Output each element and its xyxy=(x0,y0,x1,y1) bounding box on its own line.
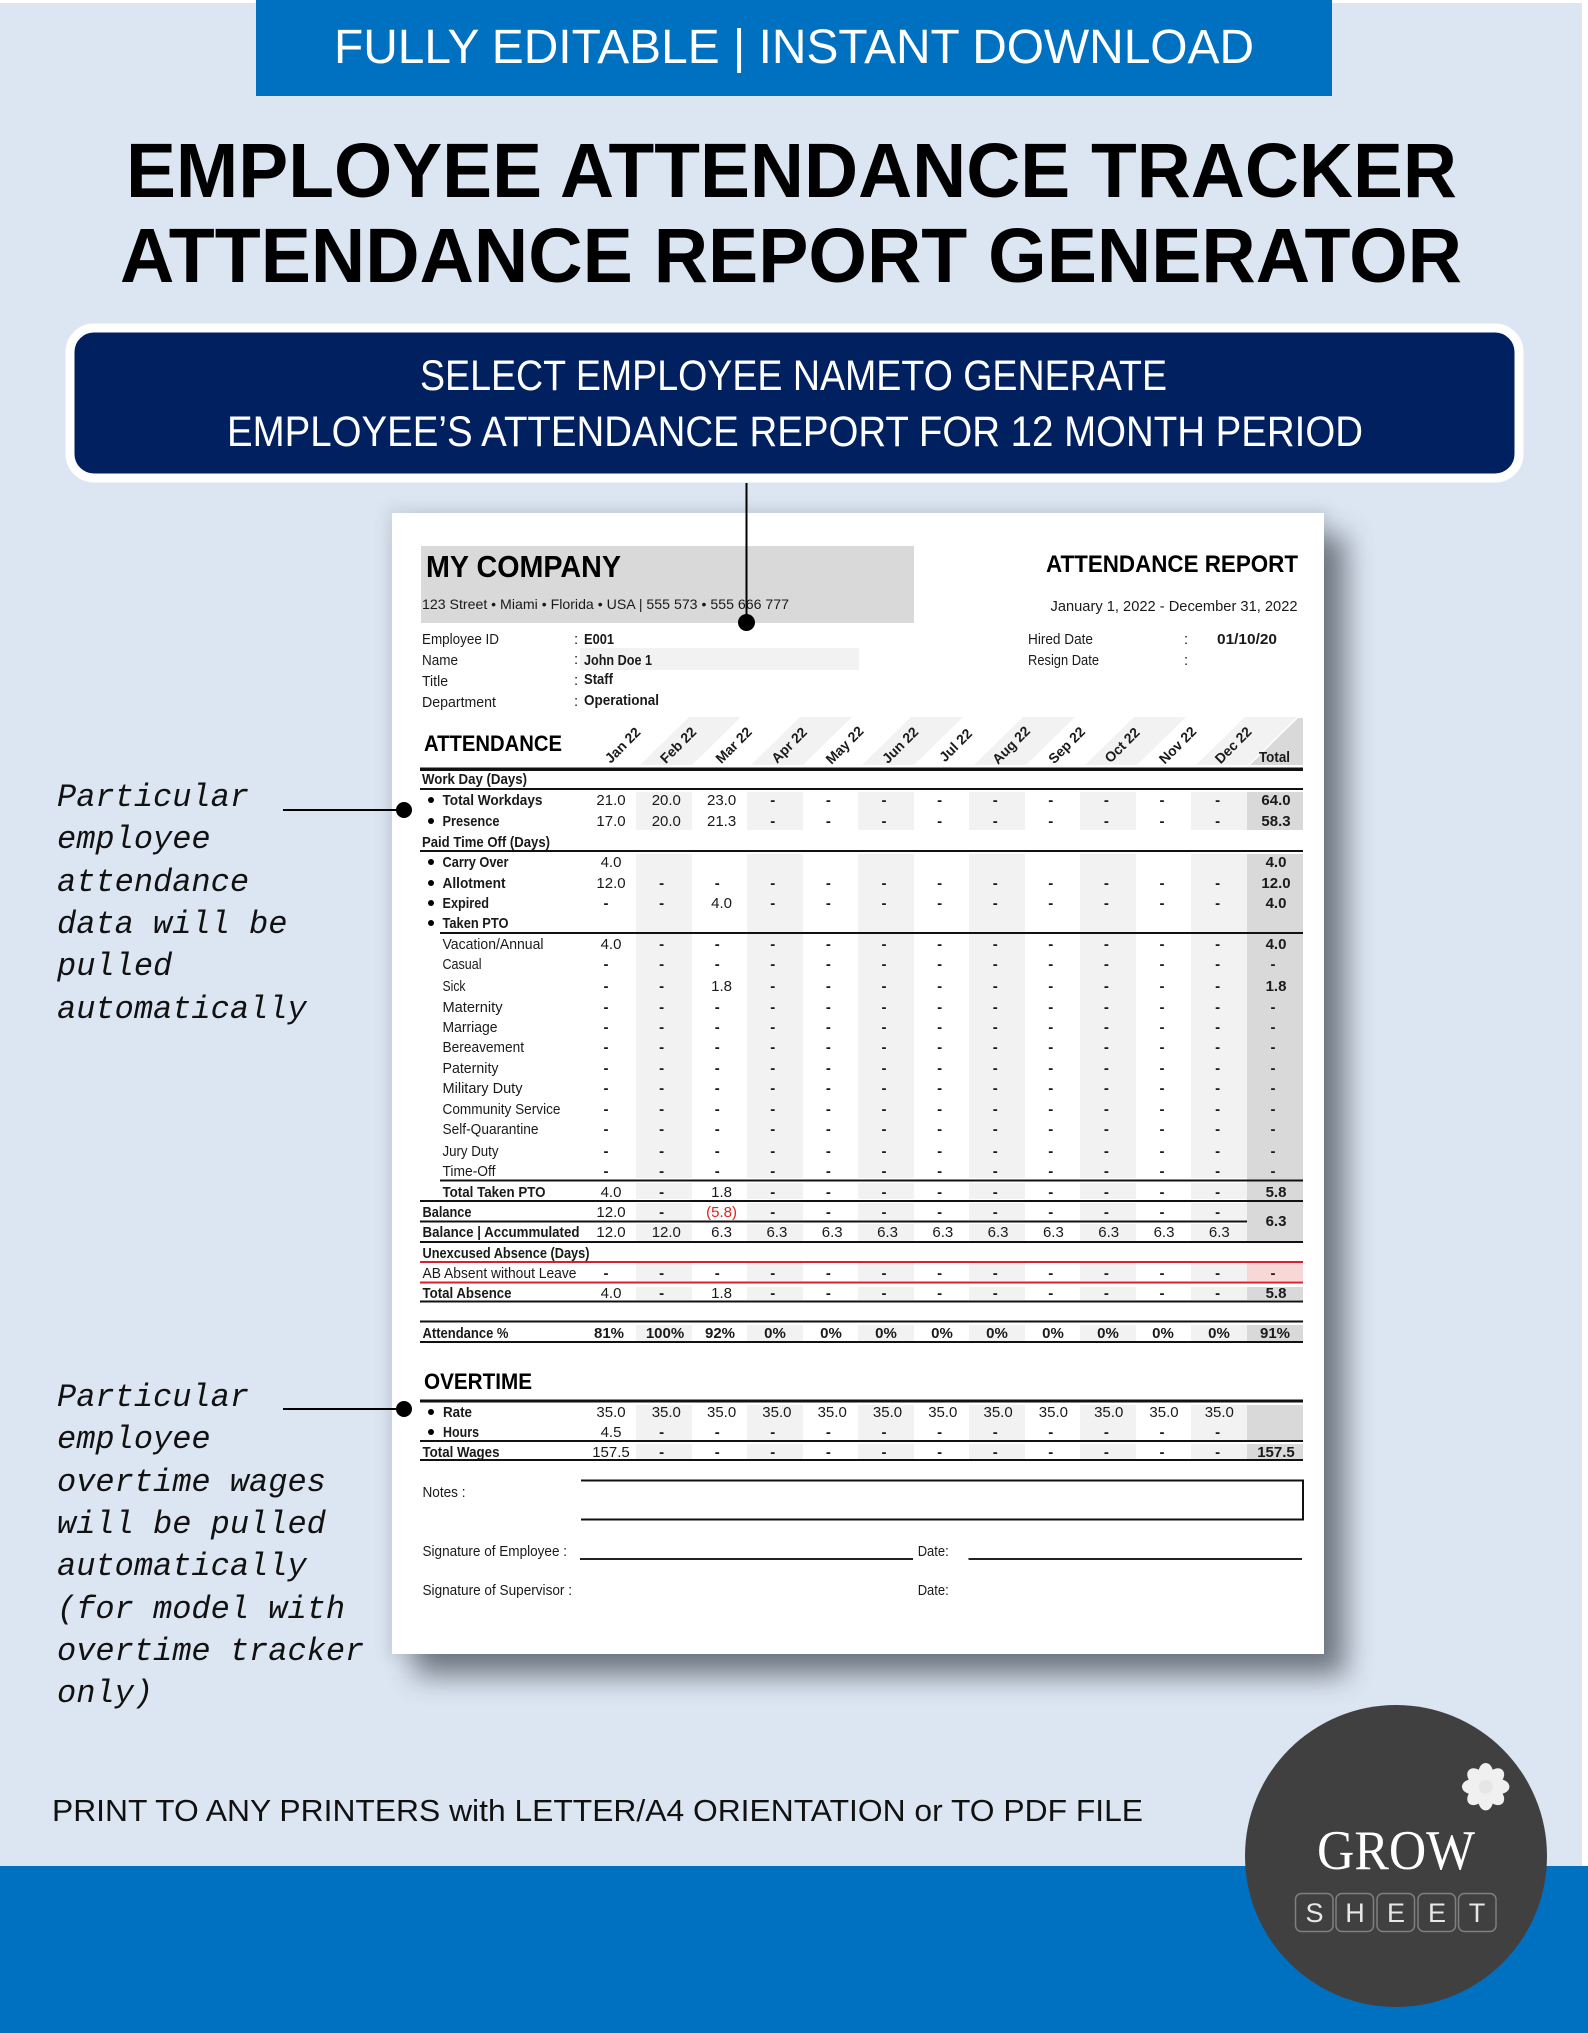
attendance: balance rows: 6.3 xyxy=(988,1224,1009,1241)
attendance: unexcused absence rows: ------------- xyxy=(604,1265,1276,1282)
print note: PRINT TO ANY PRINTERS with LETTER/A4 ORIENTATION or TO PDF FILE xyxy=(52,1793,1143,1828)
logo: Grow Sheet xyxy=(1245,1705,1547,2007)
attendance: paid time off rows: 4.0 xyxy=(601,936,621,953)
month header: Aug 22 xyxy=(989,723,1033,767)
attendance: paid time off rows: 4.0 xyxy=(601,854,621,871)
callout: overtime note: Particular xyxy=(57,1379,249,1416)
logo: Grow Sheet: E xyxy=(1387,1898,1405,1928)
overtime rows: 35.0 xyxy=(1205,1404,1234,1421)
attendance: balance rows: 6.3 xyxy=(766,1224,787,1241)
page shadow xyxy=(414,535,1346,1676)
logo: Grow Sheet: E xyxy=(1428,1898,1446,1928)
attendance: balance rows: ---------- xyxy=(659,1204,1220,1221)
overtime rows: 35.0 xyxy=(818,1404,847,1421)
employee details: Department xyxy=(422,694,497,711)
attendance percent row: 0% xyxy=(931,1325,953,1342)
title: EMPLOYEE ATTENDANCE TRACKER xyxy=(126,128,1457,214)
callout: select employee name: SELECT EMPLOYEE NAMETO GENERATE xyxy=(420,352,1167,400)
attendance: paid time off rows: Maternity xyxy=(442,999,503,1016)
logo keys xyxy=(1296,1894,1496,1932)
attendance: paid time off rows: Allotment xyxy=(442,875,506,892)
attendance: paid time off rows: Paid Time Off (Days) xyxy=(422,834,550,851)
overtime rows: ----------- xyxy=(659,1424,1220,1441)
month header: Jul 22 xyxy=(936,725,975,765)
attendance percent row: Attendance % xyxy=(422,1325,508,1342)
attendance: paid time off rows: ----------- xyxy=(659,936,1220,953)
month header: Oct 22 xyxy=(1101,724,1143,766)
employee details xyxy=(422,631,1277,711)
attendance: work day rows: 21.0 xyxy=(596,792,626,809)
attendance: work day rows xyxy=(422,771,1291,830)
icon: flower xyxy=(1462,1763,1509,1810)
employee details: John Doe 1 xyxy=(584,652,652,669)
employee details: Title xyxy=(422,673,448,690)
page shadow: faint halo xyxy=(388,509,1328,1658)
attendance: balance rows xyxy=(422,1204,1286,1241)
title: ATTENDANCE REPORT GENERATOR xyxy=(120,213,1462,299)
overtime rows: 35.0 xyxy=(762,1404,792,1421)
attendance: work day rows: Work Day (Days) xyxy=(422,771,527,788)
attendance: paid time off rows: ------------- xyxy=(604,999,1276,1016)
employee details: : xyxy=(574,693,578,710)
attendance: paid time off rows xyxy=(422,834,1291,1201)
attendance: paid time off rows: Carry Over xyxy=(442,854,509,871)
month header: Total xyxy=(1259,749,1290,766)
attendance: work day rows: 20.0 xyxy=(652,813,681,830)
attendance percent row: 0% xyxy=(1097,1325,1119,1342)
report heading: ATTENDANCE REPORT xyxy=(1046,551,1298,578)
arrow: name selector pointer xyxy=(738,483,755,631)
attendance: work day rows: Presence xyxy=(442,813,500,830)
overtime heading: OVERTIME xyxy=(424,1369,532,1394)
month header xyxy=(601,717,1303,767)
attendance: paid time off rows: Jury Duty xyxy=(442,1143,499,1160)
attendance: paid time off rows: 1.8 xyxy=(711,1184,732,1201)
panel: attendance report sheet xyxy=(392,513,1324,1654)
attendance percent row: 0% xyxy=(1152,1325,1174,1342)
attendance: paid time off rows: 12.0 xyxy=(1261,875,1291,892)
attendance percent row: 92% xyxy=(705,1325,735,1342)
logo: Grow Sheet: H xyxy=(1345,1898,1365,1928)
attendance: paid time off rows: Vacation/Annual xyxy=(442,936,544,953)
month header: Apr 22 xyxy=(768,724,810,766)
attendance: work day rows: 20.0 xyxy=(652,792,681,809)
attendance: work day rows: 23.0 xyxy=(707,792,736,809)
attendance percent row: 0% xyxy=(986,1325,1008,1342)
overtime rows: 4.5 xyxy=(601,1424,621,1441)
attendance: paid time off rows: ------------- xyxy=(604,1143,1276,1160)
employee details: Name xyxy=(422,652,458,669)
callout: select employee name xyxy=(70,328,1519,478)
attendance: unexcused absence rows: 4.0 xyxy=(601,1285,621,1302)
attendance: balance rows: 12.0 xyxy=(596,1224,626,1241)
attendance: work day rows: 58.3 xyxy=(1261,813,1291,830)
attendance: unexcused absence rows: 1.8 xyxy=(711,1285,732,1302)
attendance: paid time off rows: Marriage xyxy=(442,1019,498,1036)
attendance: unexcused absence rows: Unexcused Absence (Days) xyxy=(422,1245,590,1262)
employee details: : xyxy=(1184,652,1188,669)
callout: attendance note xyxy=(56,779,307,1028)
attendance: paid time off rows: 4.0 xyxy=(1266,854,1286,871)
attendance: paid time off rows: Taken PTO xyxy=(442,915,509,932)
notes box: Notes : xyxy=(422,1484,466,1501)
attendance: paid time off rows: Paternity xyxy=(442,1060,499,1077)
callout: overtime note: will be pulled xyxy=(57,1506,327,1543)
report heading xyxy=(1046,551,1298,615)
callout: attendance note: data will be xyxy=(57,906,287,943)
attendance heading: ATTENDANCE xyxy=(424,731,562,756)
callout: overtime note: only) xyxy=(57,1675,153,1712)
attendance: paid time off rows: ------------- xyxy=(604,1163,1276,1180)
attendance percent row xyxy=(422,1325,1290,1342)
month header: Jan 22 xyxy=(601,724,644,766)
attendance: paid time off rows: ----------- xyxy=(659,875,1220,892)
month header: May 22 xyxy=(822,723,867,767)
attendance percent row: 0% xyxy=(820,1325,842,1342)
attendance: paid time off rows: ----------- xyxy=(604,978,1220,995)
employee details: E001 xyxy=(584,631,614,648)
attendance: balance rows: 6.3 xyxy=(1266,1213,1286,1230)
attendance: work day rows: Total Workdays xyxy=(442,792,542,809)
report heading: January 1, 2022 - December 31, 2022 xyxy=(1050,598,1298,615)
top banner: FULLY EDITABLE | INSTANT DOWNLOAD xyxy=(334,21,1254,74)
overtime rows: Total Wages xyxy=(422,1444,500,1461)
signature lines: Signature of Supervisor : xyxy=(422,1582,572,1599)
attendance percent row: 81% xyxy=(594,1325,624,1342)
attendance: paid time off rows: ---------- xyxy=(659,1184,1220,1201)
table rules xyxy=(420,768,1303,1461)
attendance: paid time off rows: Casual xyxy=(442,956,482,973)
attendance: paid time off rows: ------------- xyxy=(604,956,1276,973)
attendance: work day rows: 17.0 xyxy=(596,813,626,830)
attendance: balance rows: 6.3 xyxy=(822,1224,843,1241)
attendance: paid time off rows: 4.0 xyxy=(601,1184,621,1201)
attendance: paid time off rows: Bereavement xyxy=(442,1039,525,1056)
footer band xyxy=(0,1866,1588,2033)
month header: Feb 22 xyxy=(657,724,699,766)
employee details: Resign Date xyxy=(1028,652,1099,669)
signature lines: Date: xyxy=(918,1582,949,1599)
attendance: unexcused absence rows: ---------- xyxy=(659,1285,1220,1302)
callout: overtime note: (for model with xyxy=(57,1591,345,1628)
attendance: balance rows: 6.3 xyxy=(932,1224,953,1241)
attendance percent row: 0% xyxy=(1208,1325,1230,1342)
attendance: balance rows: 6.3 xyxy=(1209,1224,1230,1241)
attendance: balance rows: (5.8) xyxy=(706,1204,737,1221)
overtime rows: 35.0 xyxy=(873,1404,902,1421)
overtime rows: 35.0 xyxy=(1039,1404,1068,1421)
logo: Grow Sheet: GROW xyxy=(1317,1820,1475,1882)
attendance: balance rows: 6.3 xyxy=(711,1224,732,1241)
title xyxy=(120,128,1462,299)
arrow: attendance note pointer xyxy=(283,802,412,818)
overtime rows: 35.0 xyxy=(652,1404,681,1421)
attendance: paid time off rows: 12.0 xyxy=(596,875,626,892)
attendance: paid time off rows: ------------- xyxy=(604,1101,1276,1118)
attendance: balance rows: 6.3 xyxy=(1098,1224,1119,1241)
attendance percent row: 91% xyxy=(1260,1325,1290,1342)
signature lines xyxy=(422,1543,1302,1599)
attendance percent row: 100% xyxy=(646,1325,684,1342)
logo: Grow Sheet: T xyxy=(1469,1898,1485,1928)
attendance: paid time off rows: Total Taken PTO xyxy=(442,1184,546,1201)
callout: attendance note: employee xyxy=(57,821,211,858)
logo: Grow Sheet: S xyxy=(1305,1898,1324,1928)
attendance: paid time off rows: 1.8 xyxy=(711,978,732,995)
callout: overtime note xyxy=(57,1379,364,1712)
top banner xyxy=(256,0,1332,96)
attendance: unexcused absence rows: AB Absent without Leave xyxy=(422,1265,576,1282)
signature lines: Date: xyxy=(918,1543,949,1560)
overtime rows: 157.5 xyxy=(592,1444,630,1461)
overtime rows: 157.5 xyxy=(1257,1444,1295,1461)
callout: overtime note: overtime tracker xyxy=(57,1633,364,1670)
employee details: Staff xyxy=(584,671,614,688)
callout: select employee name: EMPLOYEE’S ATTENDANCE REPORT FOR 12 MONTH PERIOD xyxy=(227,408,1363,456)
attendance: work day rows: 64.0 xyxy=(1261,792,1291,809)
company header block: 123 Street • Miami • Florida • USA | 555 573 • 555 666 777 xyxy=(422,596,789,612)
company header block: MY COMPANY xyxy=(426,549,621,584)
column shading xyxy=(636,792,1303,1459)
overtime rows: 35.0 xyxy=(596,1404,626,1421)
attendance: paid time off rows: 4.0 xyxy=(1266,936,1286,953)
arrow: overtime note pointer xyxy=(283,1401,412,1417)
notes box xyxy=(422,1480,1303,1520)
attendance: balance rows: 6.3 xyxy=(1043,1224,1064,1241)
attendance: work day rows: --------- xyxy=(770,813,1220,830)
callout: overtime note: overtime wages xyxy=(57,1464,326,1501)
callout: attendance note: attendance xyxy=(57,864,249,901)
callout: attendance note: pulled xyxy=(56,948,173,985)
callout: overtime note: automatically xyxy=(57,1548,307,1585)
overtime rows: Hours xyxy=(443,1424,479,1441)
employee details: 01/10/20 xyxy=(1217,631,1277,648)
attendance: paid time off rows: Expired xyxy=(442,895,489,912)
attendance: paid time off rows: ------------- xyxy=(604,1080,1276,1097)
overtime rows: 35.0 xyxy=(983,1404,1013,1421)
attendance: work day rows: 21.3 xyxy=(707,813,736,830)
attendance: paid time off rows: 5.8 xyxy=(1266,1184,1286,1201)
attendance: paid time off rows: ------------- xyxy=(604,1039,1276,1056)
overtime rows: 35.0 xyxy=(1094,1404,1123,1421)
overtime rows: Rate xyxy=(443,1404,472,1421)
attendance: work day rows: --------- xyxy=(770,792,1220,809)
attendance: paid time off rows: 4.0 xyxy=(711,895,732,912)
month header: Sep 22 xyxy=(1045,723,1088,767)
callout: attendance note: automatically xyxy=(57,991,307,1028)
attendance: balance rows: 6.3 xyxy=(877,1224,898,1241)
overtime rows xyxy=(422,1404,1295,1461)
attendance: paid time off rows: ----------- xyxy=(604,895,1220,912)
overtime rows: ----------- xyxy=(659,1444,1220,1461)
employee details: : xyxy=(574,651,578,668)
attendance: paid time off rows: 4.0 xyxy=(1266,895,1286,912)
attendance: paid time off rows: 1.8 xyxy=(1266,978,1286,995)
employee details: Operational xyxy=(584,692,659,709)
signature lines: Signature of Employee : xyxy=(422,1543,567,1560)
attendance: balance rows: 12.0 xyxy=(596,1204,626,1221)
attendance: paid time off rows: Military Duty xyxy=(442,1080,523,1097)
attendance: paid time off rows: ------------- xyxy=(604,1019,1276,1036)
attendance: balance rows: Balance | Accummulated xyxy=(422,1224,580,1241)
attendance: paid time off rows: ------------- xyxy=(604,1060,1276,1077)
attendance: unexcused absence rows: 5.8 xyxy=(1266,1285,1286,1302)
attendance: paid time off rows: Time-Off xyxy=(442,1163,496,1180)
attendance: paid time off rows: ------------- xyxy=(604,1121,1276,1138)
overtime rows: 35.0 xyxy=(928,1404,957,1421)
employee details: Employee ID xyxy=(422,631,499,648)
month header: Mar 22 xyxy=(712,724,755,766)
month header: Jun 22 xyxy=(879,724,921,766)
attendance: unexcused absence rows xyxy=(422,1245,1286,1302)
attendance percent row: 0% xyxy=(1042,1325,1064,1342)
month header: Nov 22 xyxy=(1156,723,1200,767)
callout: overtime note: employee xyxy=(57,1421,211,1458)
overtime rows: 35.0 xyxy=(707,1404,736,1421)
attendance percent row: 0% xyxy=(875,1325,897,1342)
attendance: balance rows: Balance xyxy=(422,1204,472,1221)
company header block xyxy=(421,546,914,623)
attendance percent row: 0% xyxy=(764,1325,786,1342)
attendance: balance rows: 12.0 xyxy=(652,1224,681,1241)
employee details: : xyxy=(574,631,578,648)
attendance: paid time off rows: Community Service xyxy=(442,1101,560,1118)
callout: attendance note: Particular xyxy=(57,779,249,816)
employee details: : xyxy=(574,672,578,689)
employee details: Hired Date xyxy=(1028,631,1093,648)
attendance: paid time off rows: Sick xyxy=(442,978,466,995)
attendance: unexcused absence rows: Total Absence xyxy=(422,1285,512,1302)
attendance: balance rows: 6.3 xyxy=(1154,1224,1174,1241)
attendance: paid time off rows: Self-Quarantine xyxy=(442,1121,538,1138)
employee details: : xyxy=(1184,631,1188,648)
overtime rows: 35.0 xyxy=(1149,1404,1179,1421)
month header: Dec 22 xyxy=(1211,723,1255,767)
